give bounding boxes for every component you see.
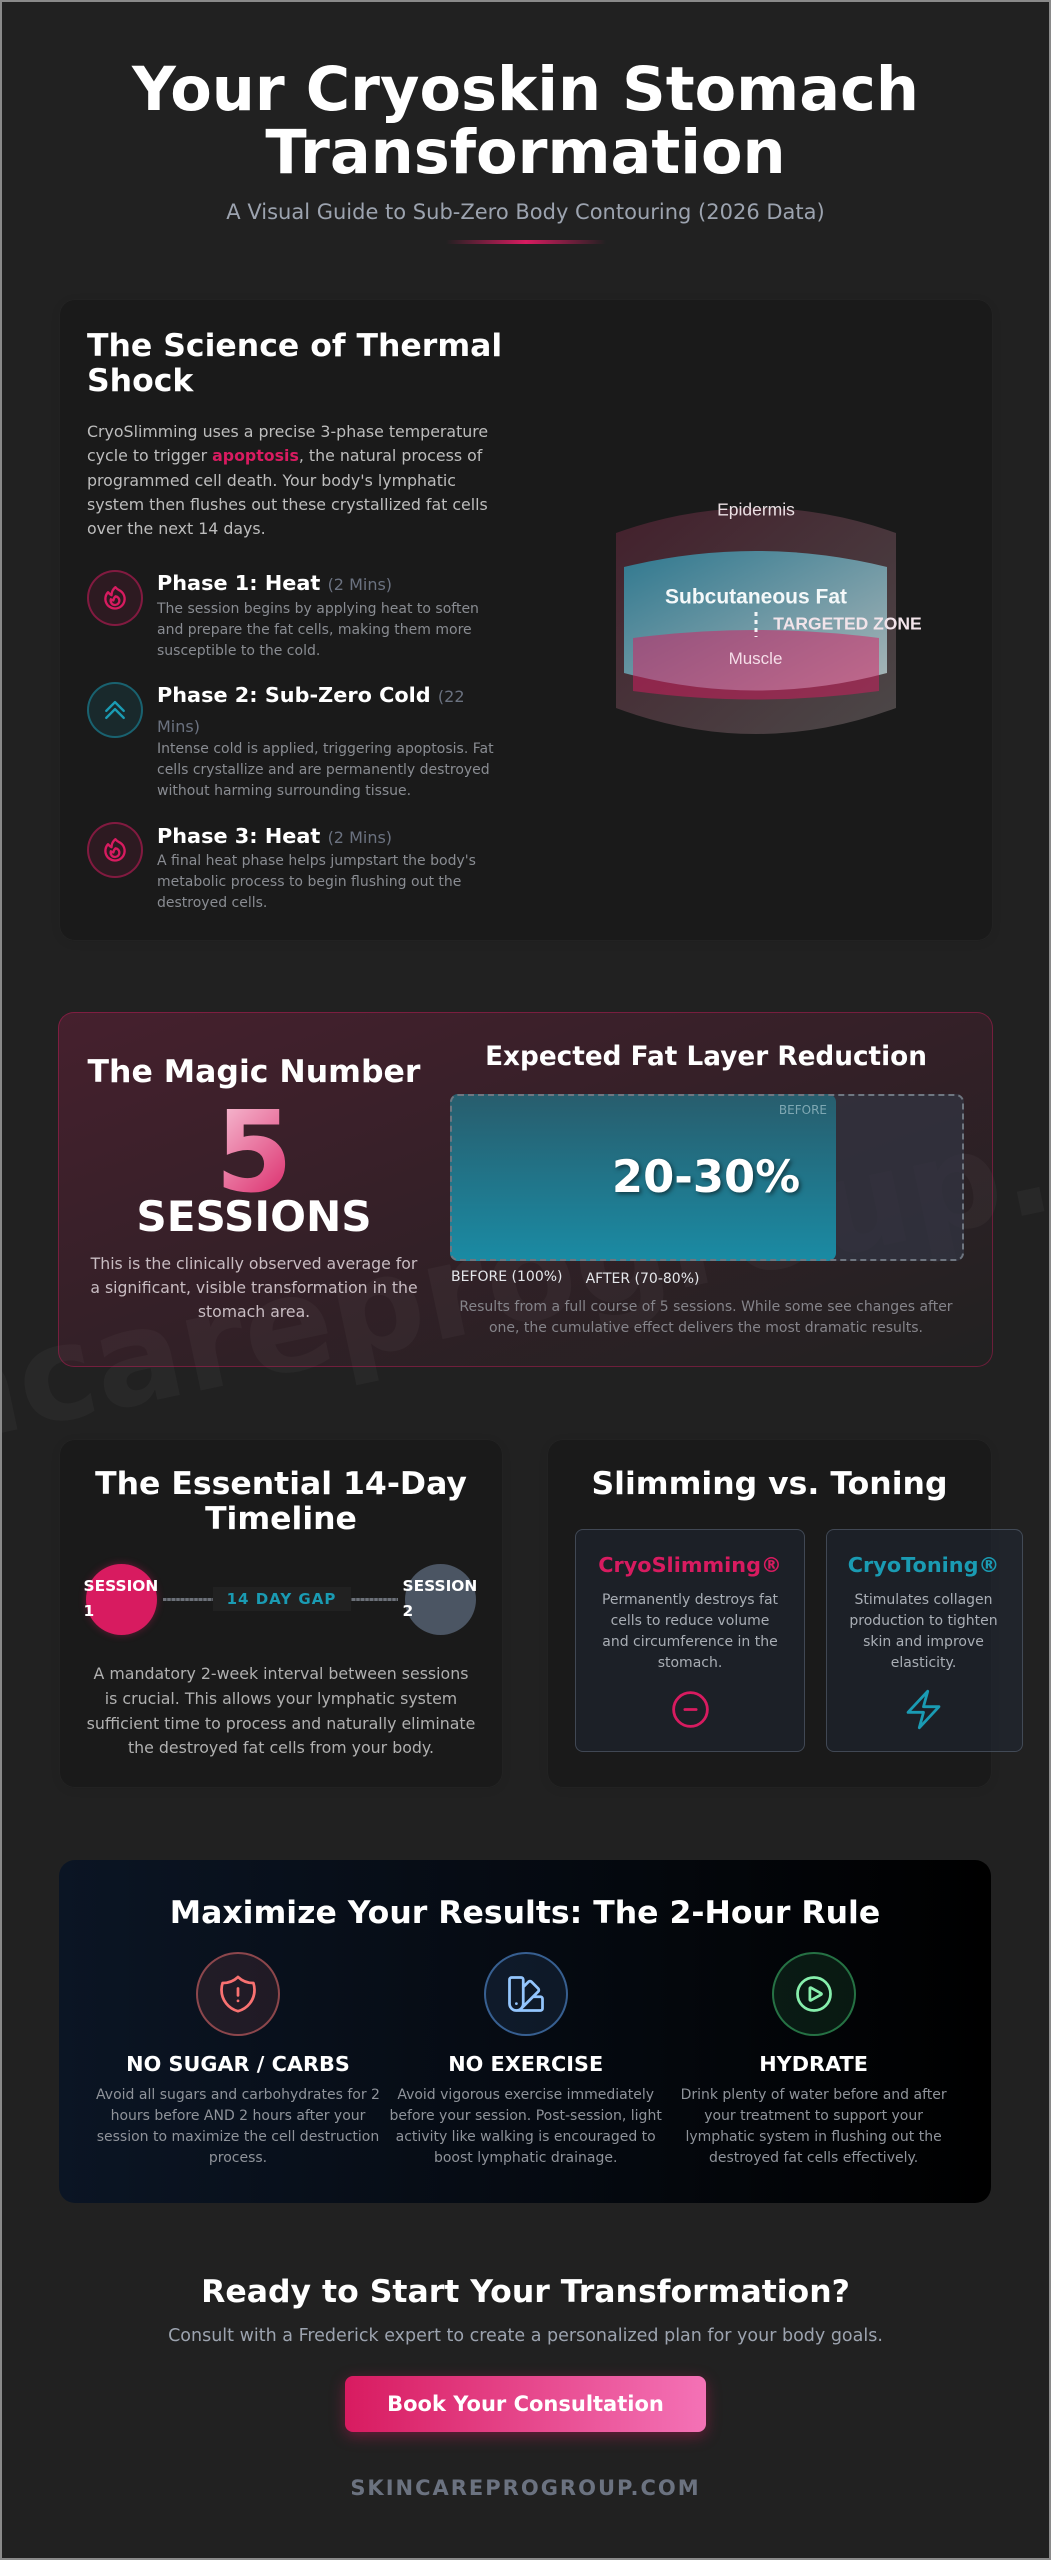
icon: play circle xyxy=(772,1952,856,2036)
title xyxy=(132,55,919,188)
cryotoning description: production to tighten xyxy=(849,1613,998,1629)
text: interval description: A mandatory 2-week interval between sessions xyxy=(94,1664,468,1683)
session 2 label xyxy=(402,1577,477,1620)
layer: muscle xyxy=(633,630,879,700)
cta heading: Ready to Start Your Transformation? xyxy=(201,2274,850,2310)
heading: science: Shock xyxy=(87,363,193,399)
rule: hydrate xyxy=(681,1952,947,2166)
cryotoning name: CryoToning® xyxy=(848,1553,999,1577)
hydrate heading: HYDRATE xyxy=(759,2052,868,2076)
cryoslimming description: and circumference in the xyxy=(602,1634,778,1650)
card: cryotoning xyxy=(826,1529,1023,1752)
label: before: BEFORE (100%) xyxy=(451,1269,562,1285)
panel: 14-day timeline xyxy=(59,1439,503,1788)
phase 3 title: Phase 3: Heat (2 Mins) xyxy=(157,824,392,848)
text: apoptosis intro: programmed cell death. Your body's lymphatic xyxy=(87,471,456,490)
phase 3 description: destroyed cells. xyxy=(157,895,267,911)
phase 2 title xyxy=(157,683,465,736)
icon: minus circle xyxy=(672,1691,709,1728)
cta button xyxy=(345,2376,706,2432)
phase 1 description: susceptible to the cold. xyxy=(157,643,320,659)
text: magic number description: This is the clinically observed average for xyxy=(91,1254,417,1272)
hydrate text xyxy=(681,2087,947,2166)
subtitle: A Visual Guide to Sub-Zero Body Contouring (2026 Data) xyxy=(226,200,825,224)
text: results note xyxy=(459,1298,953,1336)
no exercise text: activity like walking is encouraged to xyxy=(396,2129,656,2145)
session 1 node xyxy=(86,1564,157,1635)
title: Transformation xyxy=(265,118,786,188)
no sugar text: process. xyxy=(209,2150,267,2166)
text: apoptosis intro: over the next 14 days. xyxy=(87,519,266,538)
layer: epidermis xyxy=(616,508,896,734)
cryotoning description: Stimulates collagen xyxy=(854,1592,993,1608)
phase 1 title: Phase 1: Heat (2 Mins) xyxy=(157,571,392,595)
title: Your Cryoskin Stomach xyxy=(132,55,919,125)
label: muscle: Muscle xyxy=(729,649,782,668)
no sugar text: session to maximize the cell destruction xyxy=(97,2129,379,2145)
icon: flame xyxy=(87,570,143,626)
label: subcutaneous fat: Subcutaneous Fat xyxy=(665,586,847,608)
hydrate text: your treatment to support your xyxy=(704,2108,923,2124)
diagram: skin layers xyxy=(616,500,922,734)
chart: fat layer bar xyxy=(450,1094,964,1261)
phase 1 description: The session begins by applying heat to soften xyxy=(157,601,479,617)
cryoslimming description: Permanently destroys fat xyxy=(602,1592,778,1608)
no exercise text xyxy=(390,2087,662,2166)
phase 3 description: metabolic process to begin flushing out the xyxy=(157,874,461,890)
phase 2 description: without harming surrounding tissue. xyxy=(157,783,411,799)
phase 2 title: Mins) xyxy=(157,717,200,736)
gap label xyxy=(212,1587,350,1611)
text: results note: Results from a full course of 5 sessions. While some see changes after xyxy=(459,1298,953,1314)
text: apoptosis intro: system then flushes out these crystallized fat cells xyxy=(87,495,488,514)
panel: science of thermal shock xyxy=(59,299,993,941)
card: cryoslimming xyxy=(575,1529,805,1752)
cryotoning description: elasticity. xyxy=(891,1655,956,1671)
text: apoptosis intro: cycle to trigger apoptosis, the natural process of xyxy=(87,446,482,465)
hydrate text: Drink plenty of water before and after xyxy=(681,2087,947,2103)
heading: fat layer reduction: Expected Fat Layer Reduction xyxy=(485,1042,927,1072)
phase 2 description: Intense cold is applied, triggering apoptosis. Fat xyxy=(157,741,494,757)
bar tag: before: BEFORE xyxy=(779,1103,827,1117)
gap label text: 14 DAY GAP xyxy=(227,1590,336,1608)
phase 1 description: and prepare the fat cells, making them more xyxy=(157,622,472,638)
cta subtext: Consult with a Frederick expert to create a personalized plan for your body goals. xyxy=(168,2326,883,2346)
targeted zone marker xyxy=(754,612,758,637)
session 2 node xyxy=(405,1564,476,1635)
phase 3 description xyxy=(157,853,476,911)
phase 2 xyxy=(87,682,494,799)
no exercise text: before your session. Post-session, light xyxy=(390,2108,662,2124)
percentage reduction: 20-30% xyxy=(612,1150,800,1203)
cryoslimming description: cells to reduce volume xyxy=(611,1613,769,1629)
label: targeted zone: TARGETED ZONE xyxy=(773,613,922,633)
text: interval description xyxy=(87,1664,475,1757)
heading: timeline xyxy=(95,1466,467,1537)
cryotoning description xyxy=(849,1592,998,1671)
cryoslimming description: stomach. xyxy=(658,1655,722,1671)
no sugar text: Avoid all sugars and carbohydrates for 2 xyxy=(96,2087,380,2103)
cryotoning description: skin and improve xyxy=(863,1634,984,1650)
heading: magic number: The Magic Number xyxy=(88,1054,420,1090)
phase 3 xyxy=(87,822,476,911)
text: magic number description: stomach area. xyxy=(198,1302,310,1321)
no exercise heading: NO EXERCISE xyxy=(448,2052,603,2076)
heading: slimming vs toning: Slimming vs. Toning xyxy=(591,1466,948,1502)
icon: double chevron xyxy=(87,682,143,738)
no sugar text xyxy=(96,2087,380,2166)
heading: 2-hour rule: Maximize Your Results: The 2-Hour Rule xyxy=(170,1895,880,1931)
phase 3 description: A final heat phase helps jumpstart the body's xyxy=(157,853,476,869)
hydrate text: lymphatic system in flushing out the xyxy=(685,2129,942,2145)
heading: science: The Science of Thermal xyxy=(87,328,502,364)
heading: science xyxy=(87,328,502,399)
heading: timeline: The Essential 14-Day xyxy=(95,1466,467,1502)
icon: shield xyxy=(196,1952,280,2036)
cryoslimming description xyxy=(602,1592,778,1671)
header accent line xyxy=(446,240,606,244)
icon: bolt xyxy=(906,1690,940,1730)
big number 5: 5 xyxy=(215,1088,293,1218)
rule: no sugar xyxy=(96,1952,380,2166)
session 1 label: 1 xyxy=(84,1602,94,1620)
cryoslimming name: CryoSlimming® xyxy=(598,1553,782,1577)
session 2 label: SESSION xyxy=(402,1577,477,1595)
text: interval description: the destroyed fat cells from your body. xyxy=(128,1738,434,1757)
panel: 2-hour rule xyxy=(59,1860,991,2203)
label: after: AFTER (70-80%) xyxy=(586,1271,699,1287)
label: epidermis: Epidermis xyxy=(717,500,795,520)
phase 2 description: cells crystallize and are permanently destroyed xyxy=(157,762,490,778)
text: apoptosis intro: CryoSlimming uses a precise 3-phase temperature xyxy=(87,422,488,441)
footer brand: SKINCAREPROGROUP.COM xyxy=(350,2476,701,2500)
no sugar text: hours before AND 2 hours after your xyxy=(111,2108,365,2124)
text: results note: one, the cumulative effect delivers the most dramatic results. xyxy=(489,1320,923,1336)
text: apoptosis intro xyxy=(87,422,488,538)
button label: Book Your Consultation xyxy=(387,2392,664,2416)
sessions label: SESSIONS xyxy=(136,1192,372,1241)
hydrate text: destroyed fat cells effectively. xyxy=(709,2150,918,2166)
session 1 label xyxy=(84,1577,158,1620)
phase 2 description xyxy=(157,741,494,799)
text: interval description: is crucial. This allows your lymphatic system xyxy=(105,1689,457,1708)
connector line xyxy=(163,1598,398,1601)
text: magic number description xyxy=(90,1254,418,1321)
no exercise text: boost lymphatic drainage. xyxy=(434,2150,617,2166)
phase 1 xyxy=(87,570,479,659)
icon: flame xyxy=(87,822,143,878)
session 1 label: SESSION xyxy=(84,1577,158,1595)
session 2 label: 2 xyxy=(402,1602,413,1620)
panel: slimming vs toning xyxy=(547,1439,992,1788)
phase 1 description xyxy=(156,601,479,659)
rule: no exercise xyxy=(390,1952,662,2166)
panel: magic number and fat reduction xyxy=(58,1012,993,1367)
layer: subcutaneous fat xyxy=(624,551,887,690)
no exercise text: Avoid vigorous exercise immediately xyxy=(397,2087,654,2103)
text: interval description: sufficient time to process and naturally eliminate xyxy=(87,1714,475,1733)
no sugar heading: NO SUGAR / CARBS xyxy=(126,2052,350,2076)
phase 2 title: Phase 2: Sub-Zero Cold (22 xyxy=(157,683,465,707)
text: magic number description: a significant, visible transformation in the xyxy=(90,1278,418,1297)
icon: swatch xyxy=(484,1952,568,2036)
heading: timeline: Timeline xyxy=(205,1501,357,1537)
bar fill: after xyxy=(450,1094,836,1261)
